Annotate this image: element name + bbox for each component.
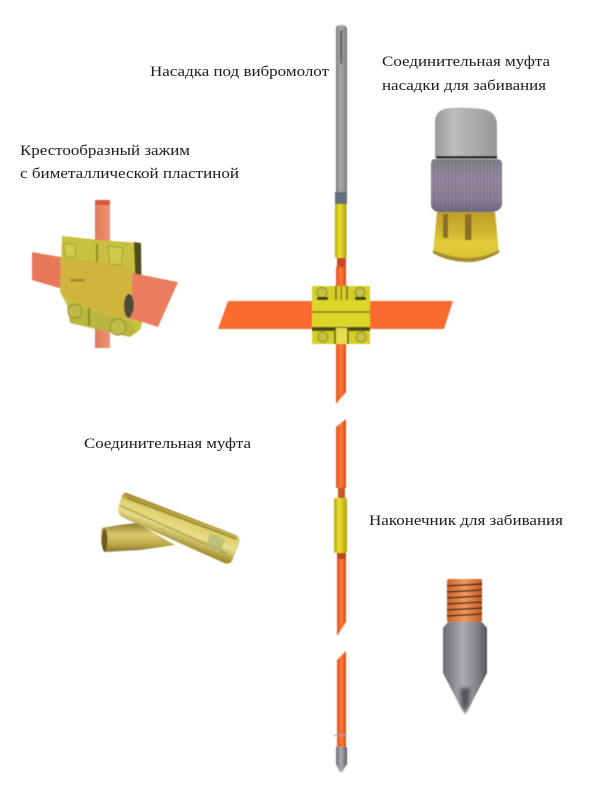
connecting coupling image [101,493,240,564]
label: coupling: Соединительная муфта [84,436,251,452]
bottom rod with tip [334,651,347,772]
cross clamp image [32,200,178,348]
yellow upper coupling [335,204,346,258]
clamp body [60,236,142,337]
threaded copper spring [447,579,482,622]
upper copper rod section [336,258,346,287]
label: vibro hammer attachment: Насадка под вибромолот [150,64,329,80]
dark cone tip [460,688,470,713]
left strip [32,252,66,290]
steel cone body [443,622,487,714]
gray driving shank [335,25,347,204]
central assembly diagram [218,25,453,772]
label: cross clamp: с биметаллической пластиной [20,166,239,182]
lower tube [101,523,175,552]
label: cross clamp [20,143,239,182]
lower copper rod section with break [336,344,346,404]
knurled collar [431,159,502,212]
horizontal copper strip [218,301,453,329]
vertical copper rod [95,200,110,348]
gray cap [435,108,497,157]
lower rod segment [334,419,347,636]
label: cross clamp: Крестообразный зажим [20,143,191,159]
yellow nut [433,212,499,262]
label: attachment coupling: насадки для забивания [382,78,546,94]
label: driving tip: Наконечник для забивания [369,513,563,529]
right strip [130,273,178,327]
attachment coupling image [431,108,502,262]
label: attachment coupling: Соединительная муфта [382,54,550,70]
label: attachment coupling [382,54,550,94]
upper tube [118,493,240,564]
center clamp [312,286,370,344]
driving tip image [443,579,487,714]
